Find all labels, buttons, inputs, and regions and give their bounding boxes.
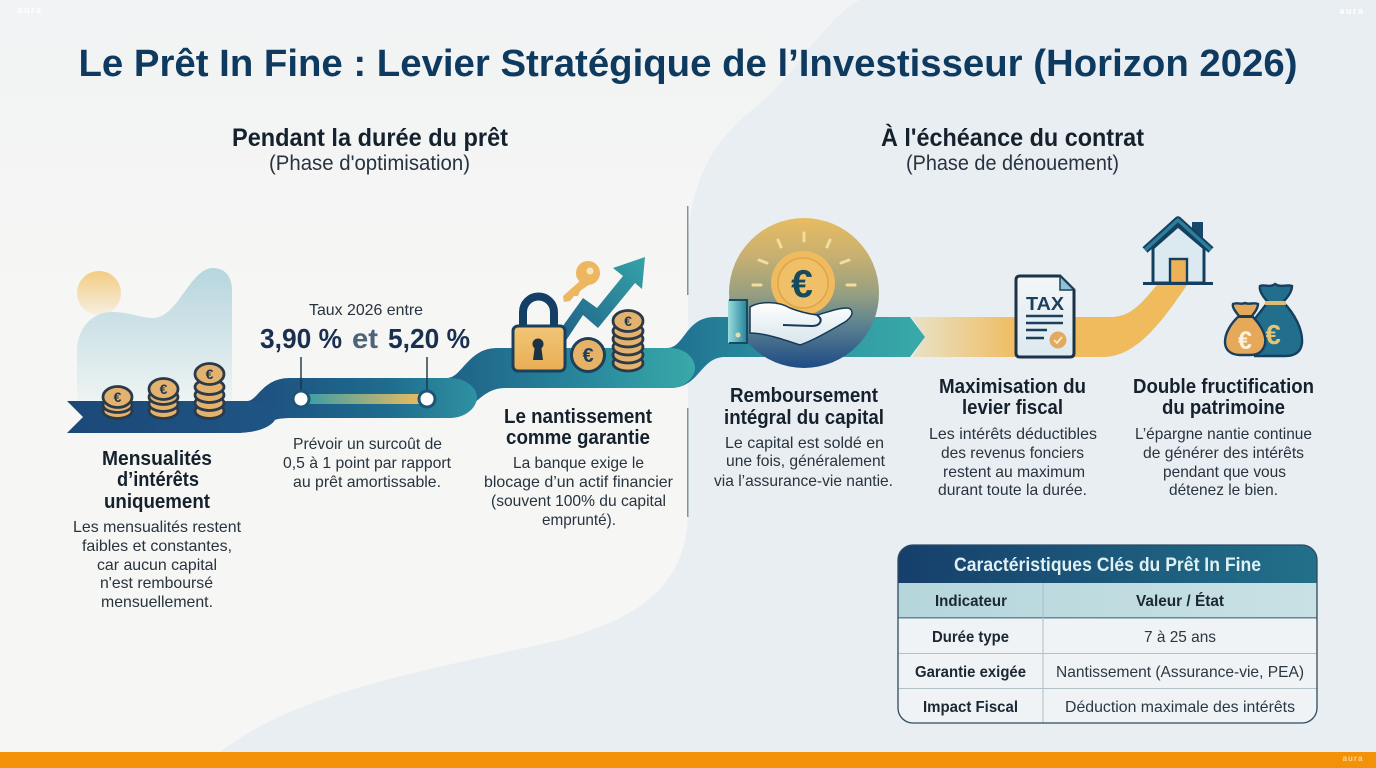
icon: money bags [1225, 284, 1302, 356]
logo top left: aura [17, 5, 43, 15]
rate label [260, 302, 470, 354]
text block: nantissement: emprunté). [542, 512, 616, 529]
icon: single coin: € [582, 345, 594, 367]
text block: double fructification [1133, 376, 1314, 499]
text block: nantissement [484, 406, 674, 529]
text block: mensualités: Mensualités [102, 448, 212, 470]
text block: nantissement: comme garantie [506, 427, 650, 449]
icon: coin stack large: € [206, 366, 214, 382]
ribbon section 2 [235, 378, 477, 433]
text block: mensualités: car aucun capital [97, 557, 217, 574]
table: caractéristiques clés: Impact Fiscal [923, 699, 1018, 716]
heading: phase 1 [232, 124, 509, 175]
divider upper [687, 206, 688, 295]
icon: coin stack medium [149, 378, 178, 418]
text block: remboursement [714, 385, 893, 490]
text block: surcoût: au prêt amortissable. [293, 474, 441, 491]
text block: mensualités: faibles et constantes, [82, 538, 232, 555]
text block: remboursement: via l’assurance-vie nantie. [714, 473, 893, 490]
table: caractéristiques clés: Garantie exigée [915, 664, 1026, 681]
text block: mensualités: n'est remboursé [100, 575, 213, 592]
text block: levier fiscal: levier fiscal [962, 397, 1063, 419]
icon: coin stack large [195, 364, 224, 418]
rate label: 5,20 % [388, 323, 470, 354]
text block: nantissement: La banque exige le [513, 455, 644, 472]
table header [898, 545, 1317, 583]
icon: tall coin stack [613, 310, 643, 371]
divider lower [687, 408, 688, 517]
landscape blob with sun [77, 268, 232, 401]
text block: mensualités: mensuellement. [101, 594, 213, 611]
icon: house [1143, 220, 1213, 285]
text block: surcoût [283, 436, 452, 491]
text block: levier fiscal: Les intérêts déductibles [929, 426, 1097, 443]
text block: mensualités: uniquement [104, 491, 210, 513]
text block: levier fiscal: durant toute la durée. [938, 482, 1087, 499]
text block: levier fiscal: Maximisation du [939, 376, 1086, 398]
gold ribbon path [912, 285, 1187, 357]
heading: phase 2: (Phase de dénouement) [906, 152, 1119, 175]
rate label: 3,90 % [260, 323, 342, 354]
text block: surcoût: 0,5 à 1 point par rapport [283, 455, 452, 472]
text block: levier fiscal: des revenus fonciers [941, 445, 1084, 462]
icon: money bags: € [1238, 327, 1252, 355]
ribbon section 4 [667, 317, 925, 388]
ribbon section 1 [67, 401, 276, 433]
rate label: et [352, 323, 378, 354]
table: caractéristiques clés: 7 à 25 ans [1144, 629, 1216, 646]
icon: tall coin stack: € [624, 313, 632, 329]
table: caractéristiques clés: Durée type [932, 629, 1009, 646]
text block: double fructification: de générer des intérêts [1143, 445, 1304, 462]
heading: phase 2 [881, 123, 1145, 175]
text block: double fructification: Double fructification [1133, 376, 1314, 398]
icon: tax document: TAX [1026, 294, 1064, 314]
icon: padlock [513, 296, 565, 371]
text block: double fructification: L’épargne nantie continue [1135, 426, 1312, 443]
heading: phase 2: À l'échéance du contrat [881, 123, 1145, 152]
icon: key [563, 261, 600, 302]
text block: mensualités: Les mensualités restent [73, 519, 242, 536]
table: caractéristiques clés: Indicateur [935, 593, 1007, 610]
text block: double fructification: du patrimoine [1162, 397, 1285, 419]
table: caractéristiques clés: Nantissement (Assurance-vie, PEA) [1056, 664, 1304, 681]
ribbon section 3 [445, 348, 695, 418]
text block: surcoût: Prévoir un surcoût de [293, 436, 442, 453]
icon: single coin [572, 338, 604, 372]
text block: levier fiscal [929, 376, 1097, 499]
text block: remboursement: Remboursement [730, 385, 878, 407]
title: Le Prêt In Fine : Levier Stratégique de l’Investisseur (Horizon 2026) [78, 43, 1298, 85]
icon: coin stack small: € [114, 389, 122, 405]
text block: nantissement: blocage d’un actif financier [484, 474, 674, 491]
icon: hand holding euro coin [728, 218, 879, 368]
table column headers [898, 583, 1317, 618]
text block: remboursement: une fois, généralement [726, 453, 886, 470]
table: caractéristiques clés: Caractéristiques Clés du Prêt In Fine [954, 555, 1261, 576]
footer bar: aura [1343, 754, 1363, 763]
text block: remboursement: Le capital est soldé en [725, 435, 884, 452]
rate slider [293, 357, 435, 407]
text block: mensualités: d’intérêts [117, 469, 199, 491]
icon: rising arrow [560, 257, 645, 345]
table: caractéristiques clés: Valeur / État [1136, 591, 1225, 610]
text block: mensualités [73, 448, 242, 611]
heading: phase 1: Pendant la durée du prêt [232, 124, 509, 152]
text block: double fructification: pendant que vous [1163, 464, 1286, 481]
text block: remboursement: intégral du capital [724, 407, 884, 429]
text block: levier fiscal: restent au maximum [943, 464, 1085, 481]
icon: coin stack medium: € [160, 381, 168, 397]
icon: coin stack small [103, 386, 132, 418]
logo top right: aura [1339, 6, 1365, 16]
text block: nantissement: Le nantissement [504, 406, 652, 428]
text block: nantissement: (souvent 100% du capital [491, 493, 666, 510]
icon: hand holding euro coin: € [791, 263, 813, 306]
heading: phase 1: (Phase d'optimisation) [269, 152, 470, 175]
rate label: Taux 2026 entre [309, 302, 423, 319]
table: caractéristiques clés [898, 545, 1317, 723]
text block: double fructification: détenez le bien. [1169, 482, 1278, 499]
footer bar [0, 752, 1376, 768]
icon: tax document [1016, 276, 1074, 357]
icon: money bags: € [1265, 319, 1281, 350]
table: caractéristiques clés: Déduction maximale des intérêts [1065, 699, 1295, 716]
